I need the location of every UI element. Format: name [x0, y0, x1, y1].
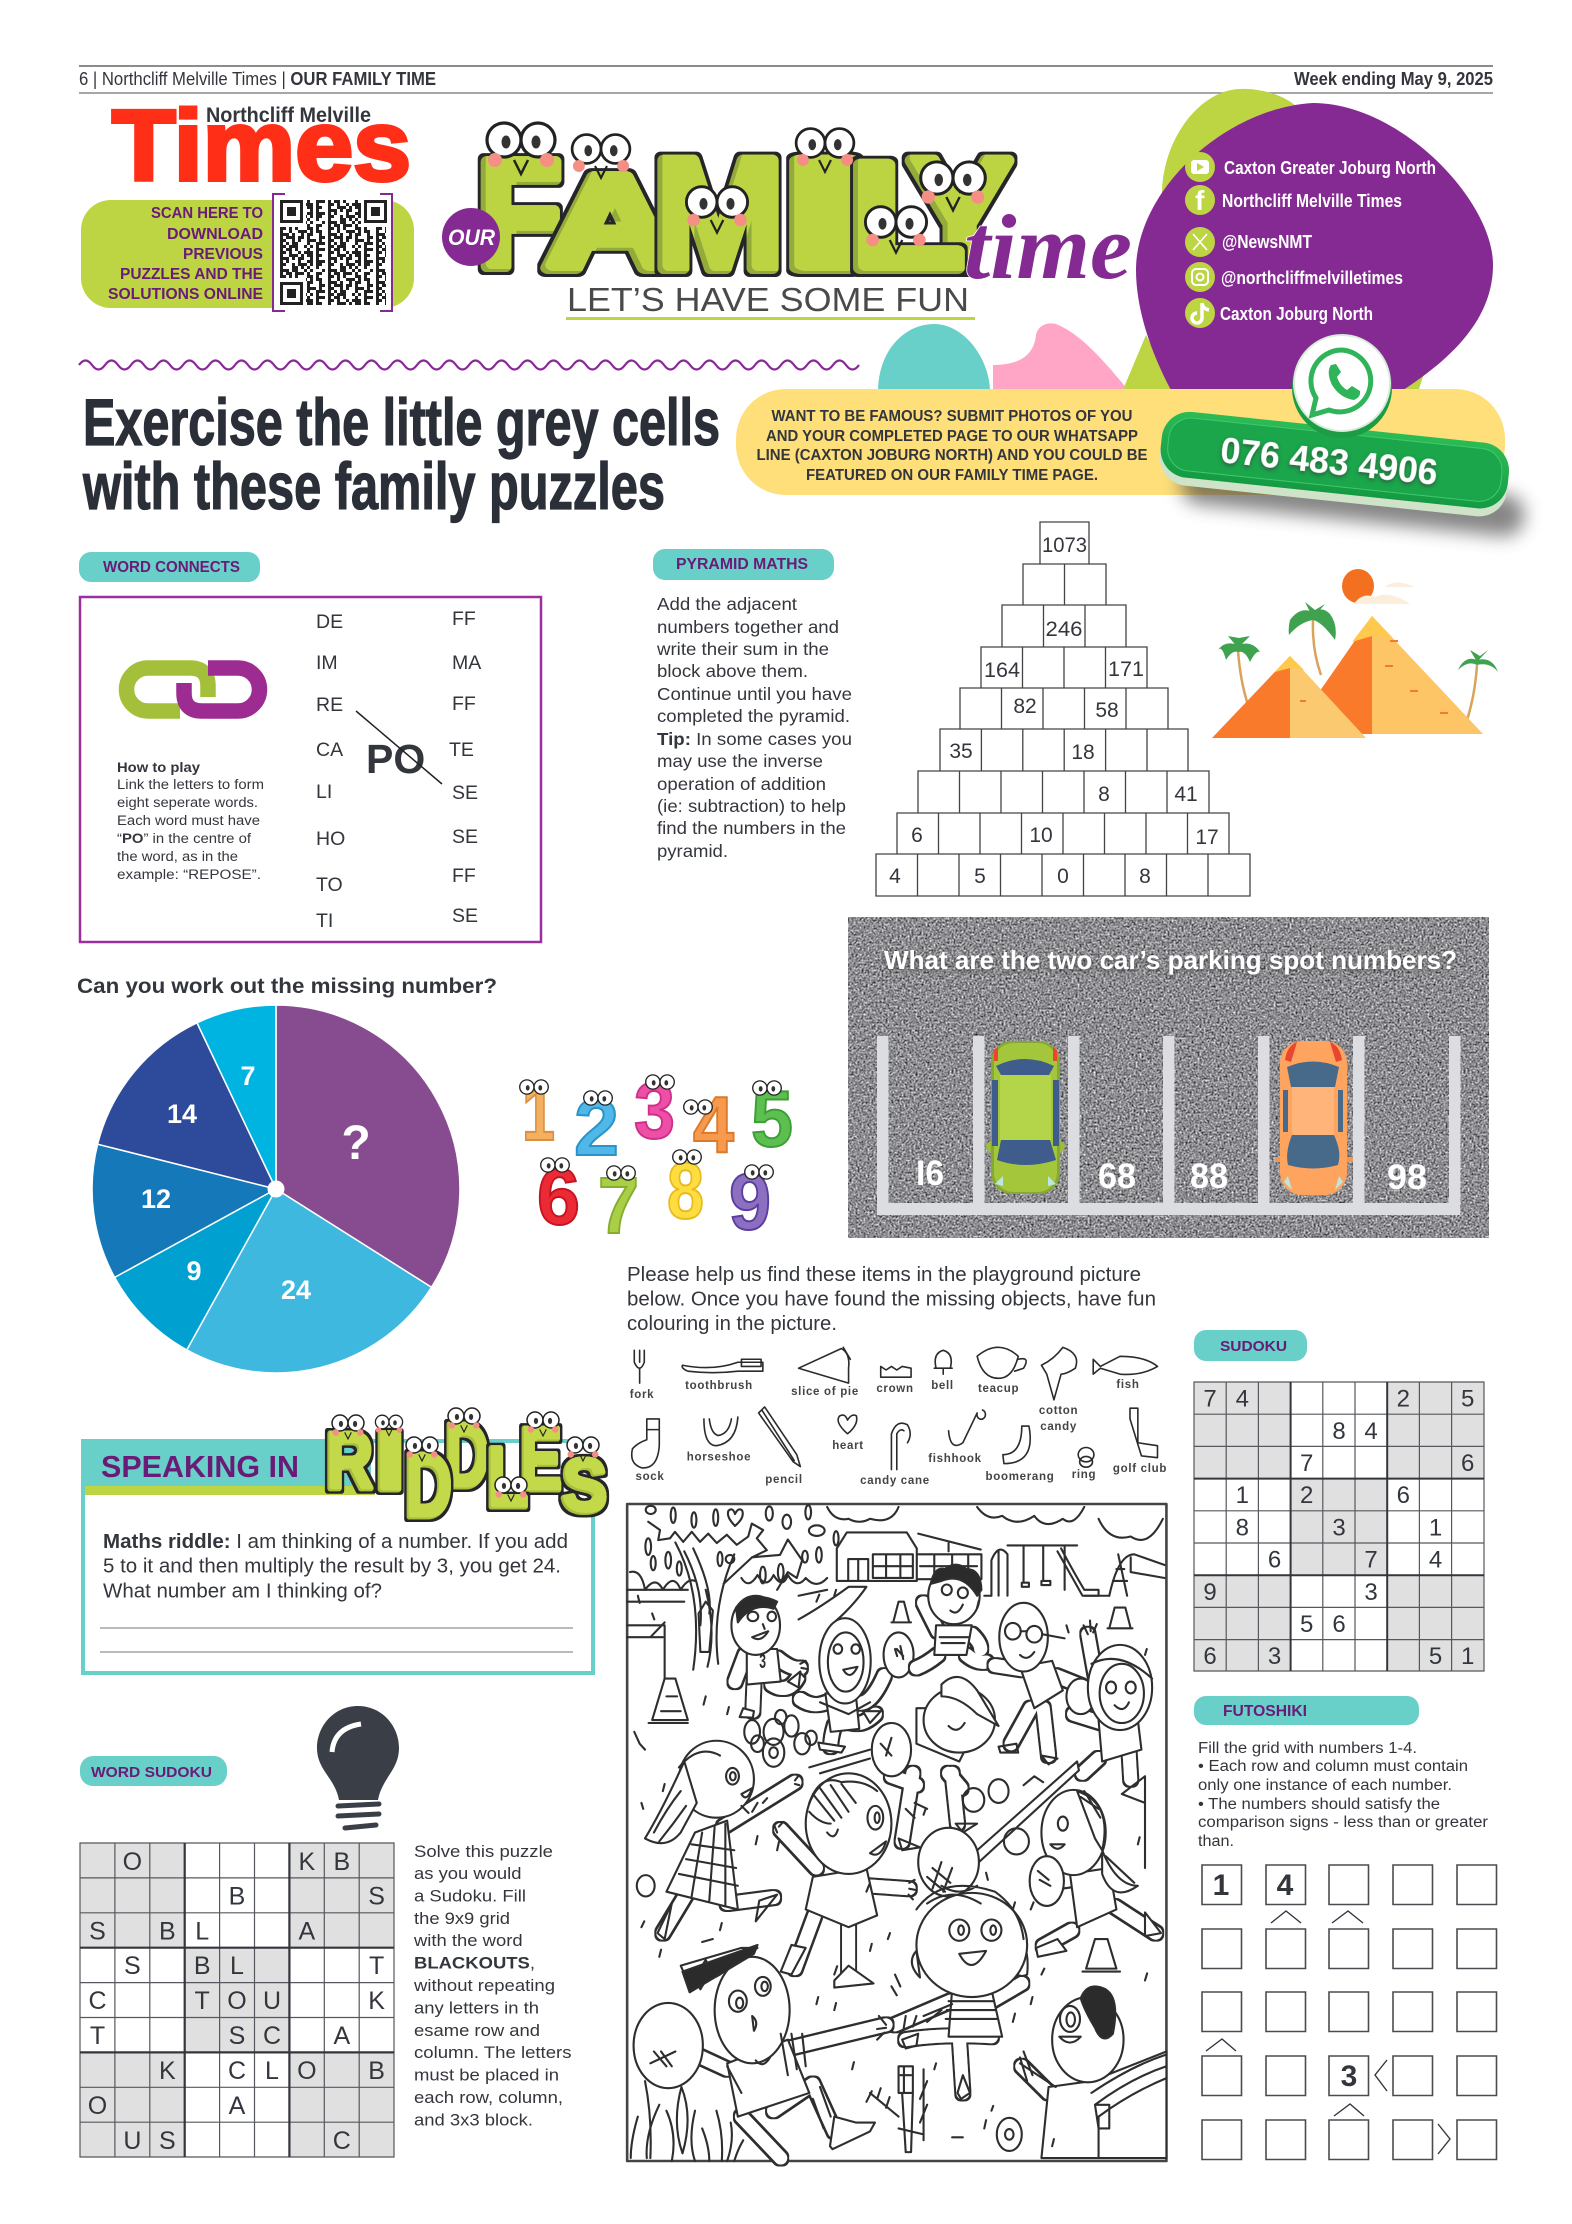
letter grid: OA [88, 2092, 246, 2120]
icon: green car [985, 1041, 1066, 1194]
how to play text: Link the letters to form [117, 777, 264, 792]
how to play text [117, 760, 264, 882]
heading: missing number: Can you work out the missing number? [77, 974, 497, 998]
title: with these family puzzles [82, 449, 665, 523]
word fragments: IM [316, 652, 338, 674]
masthead: Our Family Time lettering: Y [908, 128, 1011, 302]
masthead: Our Family Time lettering: A [544, 149, 676, 296]
hidden item labels: fishhook [928, 1453, 982, 1465]
hidden item labels: heart [832, 1440, 864, 1452]
instructions: may use the inverse [657, 751, 823, 771]
illustration: cartoon numbers: 3 [634, 1066, 675, 1155]
hidden item labels: cotton [1039, 1405, 1078, 1417]
number pyramid: 4 [889, 865, 901, 888]
number pyramid: 58 [1095, 699, 1119, 722]
callout: WhatsApp submission: FEATURED ON OUR FAMILY TIME PAGE. [806, 467, 1098, 484]
riddles lettering [326, 1406, 606, 1536]
callout: WhatsApp submission [736, 335, 1526, 538]
riddles lettering: R [326, 1416, 372, 1506]
word fragments: SE [452, 826, 478, 848]
how to play text: example: “REPOSE”. [117, 867, 261, 882]
number pyramid: 171 [1108, 658, 1144, 681]
heading: What are the two car’s parking spot numbers? [884, 945, 1457, 975]
number grid: 674 [1268, 1546, 1442, 1574]
word sudoku instructions: must be placed in [414, 2066, 559, 2085]
icon: chain link [126, 668, 260, 711]
number pyramid: 5 [974, 865, 986, 888]
heading pill: word connects [79, 552, 260, 582]
pie chart: 12 [141, 1184, 171, 1214]
panel: social media blob: Caxton Joburg North [1220, 304, 1373, 324]
hidden item labels: boomerang [986, 1471, 1054, 1483]
panel: social media blob: f [1195, 185, 1205, 216]
callout: WhatsApp submission: AND YOUR COMPLETED PAGE TO OUR WHATSAPP [766, 428, 1138, 445]
decorative wave line and coloured blobs [79, 323, 1130, 392]
instructions: colouring in the picture. [627, 1312, 837, 1335]
number pyramid: 10 [1029, 824, 1053, 847]
masthead: Our Family Time lettering: L [848, 132, 963, 300]
how to play text: Each word must have [117, 813, 260, 828]
word fragments: LI [316, 781, 332, 803]
logo: Northcliff Melville Times: Northcliff Melville [206, 104, 371, 127]
panel: Futoshiki [1194, 1696, 1496, 2160]
illustration: cartoon numbers: 4 [693, 1080, 734, 1169]
number grid: 126 [1236, 1482, 1410, 1509]
masthead: Our Family Time lettering: F [477, 129, 561, 298]
letter grid: TSCA [90, 2022, 350, 2050]
futoshiki grid [1202, 1865, 1496, 2160]
illustration: cartoon numbers [520, 1066, 793, 1250]
colouring picture: 3 [759, 1650, 766, 1673]
number grid: 7425 [1203, 1386, 1474, 1412]
heading pill: futoshiki: FUTOSHIKI [1223, 1703, 1307, 1720]
masthead: Our Family Time lettering [442, 123, 1132, 320]
how to play text: “PO” in the centre of [117, 831, 251, 846]
word fragments: RE [316, 694, 343, 716]
panel: QR scan callout: PREVIOUS [183, 246, 263, 263]
colouring picture [627, 1504, 1166, 2161]
futoshiki grid: 4 [1277, 1869, 1294, 1902]
number pyramid: 8 [1098, 783, 1110, 806]
callout: WhatsApp submission: LINE (CAXTON JOBURG NORTH) AND YOU COULD BE [756, 447, 1148, 464]
riddles lettering: L [486, 1430, 528, 1524]
futoshiki grid: 1 [1213, 1869, 1229, 1902]
parking bays [877, 1036, 1460, 1215]
how to play text: How to play [117, 760, 201, 775]
riddles lettering: E [520, 1410, 562, 1508]
panel: Speaking in Riddles [81, 1406, 606, 1673]
word sudoku instructions: Solve this puzzle [414, 1842, 553, 1861]
word sudoku instructions: a Sudoku. Fill [414, 1886, 526, 1906]
panel: hidden objects colouring [627, 1263, 1167, 2161]
pie chart: 9 [186, 1256, 202, 1286]
panel: QR scan callout [81, 193, 414, 312]
parking numbers: I6 [916, 1154, 944, 1193]
panel: Word Connects [79, 552, 541, 942]
illustration: cartoon numbers: 9 [729, 1157, 771, 1246]
how to play text: the word, as in the [117, 849, 238, 864]
word sudoku instructions: each row, column, [414, 2088, 563, 2107]
word sudoku instructions: the 9x9 grid [414, 1909, 510, 1928]
word sudoku instructions: with the word [413, 1931, 523, 1950]
hidden item labels: candy cane [860, 1475, 930, 1487]
hidden item labels: toothbrush [685, 1380, 753, 1392]
hidden item labels: crown [876, 1383, 914, 1395]
panel: social media blob [1122, 89, 1493, 392]
parking numbers: 68 [1098, 1157, 1136, 1196]
pie chart [92, 1005, 460, 1373]
callout: WhatsApp submission: 076 483 4906 [1219, 429, 1440, 493]
parking numbers: 88 [1190, 1157, 1228, 1196]
instructions: operation of addition [657, 774, 826, 794]
header rules and running head: Week ending May 9, 2025 [1294, 69, 1493, 89]
futoshiki instructions [1198, 1740, 1488, 1850]
word sudoku instructions: esame row and [414, 2021, 540, 2040]
panel: social media blob: Caxton Greater Joburg North [1224, 158, 1436, 178]
panel: QR scan callout: PUZZLES AND THE [120, 266, 263, 283]
hidden item labels: candy [1040, 1421, 1077, 1433]
word sudoku instructions: without repeating [413, 1976, 555, 1995]
hidden item labels: pencil [765, 1474, 803, 1486]
hidden item labels: ring [1072, 1469, 1096, 1481]
word fragments: TO [316, 874, 343, 896]
number grid: 56 [1300, 1611, 1346, 1638]
riddles lettering: I [374, 1416, 404, 1508]
letter grid: OKB [123, 1848, 350, 1876]
heading pill: word sudoku: WORD SUDOKU [91, 1764, 212, 1781]
letter grid: BS [229, 1882, 385, 1910]
number pyramid: 17 [1195, 826, 1219, 849]
header rules and running head: 6 | Northcliff Melville Times | OUR FAMILY TIME [79, 69, 436, 89]
riddles lettering: S [562, 1444, 606, 1528]
illustration: desert pyramids [1212, 569, 1498, 738]
pie chart: ? [341, 1117, 371, 1170]
callout: WhatsApp submission: WANT TO BE FAMOUS? SUBMIT PHOTOS OF YOU [772, 408, 1132, 425]
number pyramid: 41 [1174, 783, 1198, 806]
hidden item labels: horseshoe [687, 1452, 751, 1464]
title: Exercise the little grey cells [83, 385, 720, 459]
word fragments: MA [452, 652, 481, 674]
word fragments: CA [316, 739, 343, 761]
number pyramid: 8 [1139, 865, 1151, 888]
number grid: 84 [1332, 1418, 1378, 1445]
futoshiki instructions: • The numbers should satisfy the [1198, 1796, 1440, 1813]
number grid: 76 [1300, 1450, 1474, 1477]
word fragments: SE [452, 905, 478, 927]
number pyramid: 18 [1071, 741, 1095, 764]
masthead: Our Family Time lettering: OUR [448, 225, 495, 250]
instructions: completed the pyramid. [657, 706, 850, 726]
hidden item labels: teacup [978, 1383, 1019, 1395]
heading pill: sudoku: SUDOKU [1220, 1338, 1287, 1355]
number pyramid: 82 [1013, 695, 1037, 718]
heading pill: pyramid maths [653, 549, 834, 580]
word fragments: TI [316, 910, 333, 932]
number grid: 831 [1236, 1514, 1442, 1542]
instructions: numbers together and [657, 617, 839, 637]
instructions: find the numbers in the [657, 818, 846, 838]
panel: social media blob: @NewsNMT [1222, 232, 1312, 252]
word sudoku instructions: BLACKOUTS , [414, 1954, 535, 1973]
instructions: pyramid. [657, 841, 728, 861]
word fragments: TE [449, 739, 474, 761]
panel: Sudoku [1194, 1330, 1484, 1671]
heading pill: word connects: WORD CONNECTS [103, 559, 240, 576]
instructions: (ie: subtraction) to help [657, 796, 846, 816]
hidden item labels: golf club [1113, 1463, 1167, 1475]
illustration: cartoon numbers: 2 [574, 1083, 619, 1172]
futoshiki instructions: only one instance of each number. [1198, 1777, 1452, 1794]
hidden item labels: fish [1116, 1379, 1140, 1391]
illustration: cartoon numbers: 8 [667, 1146, 704, 1235]
number pyramid: 246 [1046, 618, 1082, 641]
number pyramid: 1073 [1042, 534, 1087, 557]
futoshiki instructions: Fill the grid with numbers 1-4. [1198, 1740, 1417, 1757]
panel: Word Sudoku [80, 1756, 572, 2157]
panel: Pyramid Maths [653, 522, 1498, 896]
word fragments: FF [452, 865, 476, 887]
word sudoku instructions [413, 1842, 572, 2129]
number pyramid: 6 [911, 824, 923, 847]
instructions: below. Once you have found the missing objects, have fun [627, 1288, 1156, 1310]
word sudoku instructions: any letters in th [414, 1998, 539, 2018]
number pyramid: 0 [1057, 865, 1069, 888]
hidden item labels: fork [630, 1389, 654, 1401]
word fragments: FF [452, 608, 476, 630]
panel: QR scan callout: SOLUTIONS ONLINE [108, 286, 263, 303]
panel: QR scan callout: SCAN HERE TO [151, 205, 263, 222]
heading pill: futoshiki [1194, 1696, 1419, 1725]
hidden item labels [630, 1379, 1167, 1487]
instructions: Please help us find these items in the playground picture [627, 1263, 1141, 1286]
letter grid: CTOUK [88, 1987, 385, 2015]
masthead: Our Family Time lettering: M [653, 128, 783, 302]
riddle text: 5 to it and then multiply the result by 3, you get 24. [103, 1556, 561, 1578]
riddles lettering: D [404, 1436, 452, 1536]
instructions: write their sum in the [656, 639, 829, 659]
pie chart: 14 [167, 1099, 197, 1129]
instructions [656, 594, 852, 861]
futoshiki instructions: comparison signs - less than or greater [1198, 1814, 1488, 1831]
pie chart: 7 [240, 1061, 256, 1091]
heading pill: sudoku [1194, 1330, 1307, 1361]
header rules and running head [79, 66, 1493, 93]
number pyramid: 35 [949, 740, 973, 763]
panel: parking puzzle [848, 917, 1489, 1238]
riddle text: What number am I thinking of? [103, 1581, 382, 1603]
number grid: 93 [1203, 1579, 1378, 1606]
panel: social media blob: Northcliff Melville Times [1222, 191, 1402, 211]
instructions [627, 1263, 1156, 1335]
hidden item labels: sock [635, 1471, 665, 1483]
word fragments: HO [316, 828, 345, 850]
futoshiki instructions: • Each row and column must contain [1198, 1758, 1468, 1775]
number grid: 6351 [1203, 1643, 1474, 1670]
word sudoku instructions: column. The letters [414, 2043, 572, 2062]
illustration: cartoon numbers: 5 [751, 1074, 793, 1163]
heading pill: pyramid maths: PYRAMID MATHS [676, 556, 808, 573]
illustration: cartoon numbers: 7 [598, 1161, 639, 1250]
word sudoku instructions: and 3x3 block. [414, 2110, 533, 2129]
riddles lettering: D [444, 1406, 488, 1506]
riddle text: Maths riddle: I am thinking of a number. If you add [103, 1531, 568, 1553]
illustration: cartoon numbers: 1 [522, 1068, 555, 1157]
letter grid: SBLT [124, 1952, 384, 1980]
parking numbers [916, 1154, 1427, 1197]
futoshiki instructions: than. [1198, 1833, 1234, 1850]
word fragments: DE [316, 611, 343, 633]
futoshiki grid: 3 [1341, 2060, 1357, 2093]
masthead: Our Family Time lettering: time [964, 196, 1132, 298]
panel: QR scan callout: DOWNLOAD [167, 226, 263, 243]
how to play text: eight seperate words. [117, 795, 258, 810]
letter grid [80, 1843, 394, 2157]
illustration: cartoon numbers: 6 [537, 1152, 580, 1241]
hidden item labels: slice of pie [791, 1386, 859, 1398]
masthead: Our Family Time lettering: LET’S HAVE SOME FUN [567, 281, 969, 318]
number pyramid [876, 522, 1250, 896]
panel: social media blob: @northcliffmelvilletimes [1221, 268, 1403, 288]
word fragments: PO [366, 736, 425, 782]
title [82, 385, 720, 523]
letter grid: USC [123, 2127, 351, 2155]
heading pill: word sudoku [80, 1756, 227, 1786]
word fragments: FF [452, 693, 476, 715]
icon: orange car [1275, 1041, 1353, 1195]
word fragments [316, 608, 481, 932]
heading: speaking in: SPEAKING IN [101, 1449, 299, 1484]
instructions: Add the adjacent [657, 594, 797, 614]
riddle text [103, 1531, 568, 1603]
letter grid: KCLOB [159, 2057, 385, 2085]
word fragments: SE [452, 782, 478, 804]
number grid [1194, 1382, 1484, 1671]
instructions: Continue until you have [657, 684, 852, 704]
masthead: Our Family Time lettering: I [780, 128, 870, 302]
pie chart: 24 [281, 1275, 311, 1305]
parking numbers: 98 [1387, 1158, 1427, 1197]
logo: Northcliff Melville Times: Times [112, 90, 411, 202]
number pyramid: 164 [984, 659, 1020, 682]
hidden item labels: bell [931, 1380, 954, 1392]
instructions: Tip: In some cases you [657, 729, 852, 749]
instructions: block above them. [657, 661, 808, 681]
icon: light bulb [317, 1706, 399, 1828]
letter grid: SBLA [89, 1918, 315, 1946]
word sudoku instructions: as you would [414, 1864, 522, 1883]
hidden item icons [632, 1347, 1157, 1470]
